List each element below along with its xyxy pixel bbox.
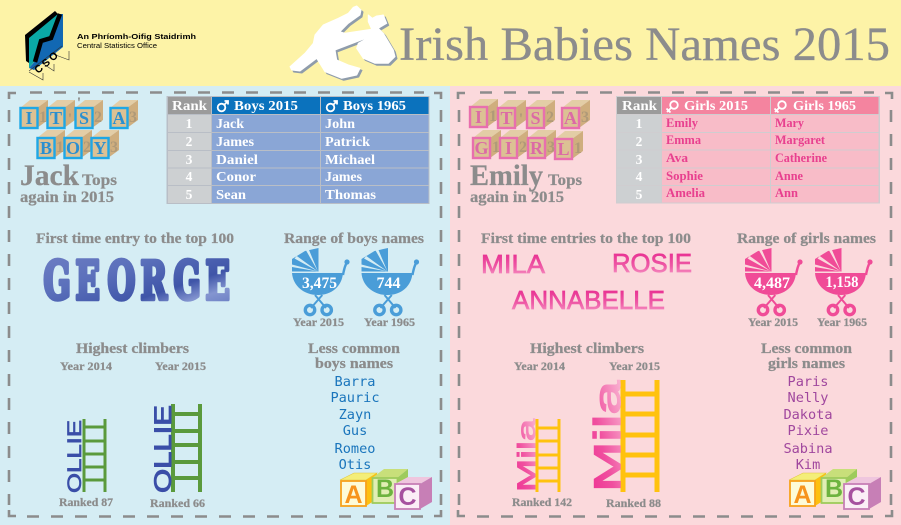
blocks: IT'S A BOY: Y [94,138,106,158]
table: boys names: Conor [216,169,256,184]
icon: ABC blocks girls: A [793,481,812,509]
table: boys names: 5 [186,187,193,202]
name: GEORGE: GEORGE [44,251,230,312]
blocks: IT'S A GIRL: R [530,138,544,158]
blocks: IT'S A BOY: 1 [39,109,47,126]
icon: ABC blocks boys [340,469,432,511]
table: boys names: 2 [186,134,193,149]
heading: Emily tops again in 2015: Tops [548,172,582,189]
blocks: IT'S A BOY: 2 [83,139,91,156]
dashed border: boys [9,92,441,516]
caption: ranks girls: Ranked 142 [512,497,572,509]
table: girls names: Anne [775,169,803,183]
table: boys names: 4 [186,169,193,184]
blocks: IT'S A BOY: S [79,108,89,128]
caption: climber years boys: Year 2014 [60,361,112,373]
table: boys names: James [325,169,362,184]
list: less common girls names: Paris [788,374,828,390]
blocks: IT'S A BOY: 1 [56,139,64,156]
icon: ABC blocks girls: C [847,483,866,511]
icon: pram 1965 girls [815,248,873,315]
blocks: IT'S A GIRL: 1 [574,140,582,157]
caption: pram years boys [293,317,415,329]
list: less common boys names: Barra [335,374,375,390]
logo: Central Statistics Office [25,11,197,80]
blocks: IT'S A GIRL: A [564,108,577,128]
icon: pram 1965 boys [362,248,419,315]
list: less common girls names: Kim [796,457,820,473]
blocks: IT'S A GIRL: S [530,108,541,128]
table: boys names: Jack [216,116,245,131]
table: boys names: James [216,134,254,149]
heading: Jack tops again in 2015: again in 2015 [20,189,114,206]
blocks: IT'S A GIRL [470,99,590,159]
heading: less common girls names [761,341,852,372]
table: girls names: Catherine [775,151,827,165]
icon: ABC blocks boys: C [398,483,417,511]
caption: climber years boys [60,361,206,373]
table: girls names: Emily [666,116,699,130]
icon: pram 2015 girls [745,248,803,315]
caption: ranks girls [512,497,661,510]
logo: Central Statistics Office: An Phríomh-Oifig Staidrimh [77,32,197,41]
heading: highest climbers boys: Highest climbers [76,341,189,357]
table: girls names: Amelia [666,186,706,200]
blocks: IT'S A GIRL: 3 [547,139,555,156]
list: less common girls names: Pixie [788,423,828,439]
table: girls names [616,96,880,204]
caption: pram years girls: Year 1965 [817,317,867,329]
ladder: Mila 2014 [513,419,559,492]
panel: girls background [450,86,901,525]
title: Irish Babies Names 2015 [399,18,890,71]
table: girls names: 3 [636,152,643,167]
list: less common boys names [330,374,380,473]
caption: climber years girls: Year 2014 [514,361,565,373]
caption: pram years girls [748,317,867,329]
blocks: IT'S A GIRL: G [474,138,489,158]
list: less common boys names: Otis [339,457,371,473]
blocks: IT'S A GIRL: 1 [492,139,500,156]
caption: ranks boys: Ranked 87 [59,497,113,509]
blocks: IT'S A BOY: 3 [129,109,137,126]
table: girls names: Girls 2015 [684,98,748,113]
table: boys names: Daniel [216,152,258,167]
ladder: Mila 2015: Mila [587,380,628,492]
table: girls names: Ava [666,151,689,165]
table: boys names: John [325,116,356,131]
names: MILA ROSIE ANNABELLE: MILA [481,249,546,279]
table: boys names: 1 [186,116,193,131]
blocks: IT'S A GIRL: I [475,107,482,127]
heading: less common girls names: girls names [768,356,845,372]
table: girls names: 4 [636,169,643,184]
heading: less common boys names [308,341,400,372]
list: less common boys names: Pauric [330,390,380,406]
icon: stork carrying bundle [290,6,397,80]
heading: Emily tops again in 2015: Emily [470,159,543,192]
ladder: Ollie 2015 [150,404,200,493]
blocks: IT'S A GIRL: 2 [519,139,527,156]
heading: less common boys names: Less common [308,341,400,357]
heading: less common girls names: Less common [761,341,852,357]
icon: ABC blocks boys: A [344,481,363,509]
caption: climber years boys: Year 2015 [155,361,206,373]
table: boys names [166,96,430,204]
caption: climber years girls: Year 2015 [609,361,660,373]
blocks: IT'S A BOY: A [112,108,126,128]
table: boys names: 3 [186,152,193,167]
caption: ranks boys [59,497,205,510]
list: less common girls names: Nelly [788,390,828,406]
list: less common girls names: Dakota [783,407,833,423]
table: girls names: 5 [636,187,643,202]
blocks: IT'S A BOY: ' [77,95,81,112]
blocks: IT'S A GIRL: L [557,139,570,159]
table: girls names: Girls 1965 [793,98,856,113]
icon: pram 2015 boys [292,248,350,315]
table: boys names: Sean [216,187,247,202]
heading: Jack tops again in 2015: Tops [82,172,117,189]
ladder: Mila 2014: Mila [513,419,541,492]
heading: first time entry boys: First time entry to the top 100 [36,231,234,247]
heading: Jack tops again in 2015: Jack [20,159,79,192]
blocks: IT'S A BOY: 2 [94,109,102,126]
names: MILA ROSIE ANNABELLE: ROSIE [612,248,692,278]
caption: ranks boys: Ranked 66 [150,498,205,510]
icon: ABC blocks boys: B [376,475,394,503]
icon: pram 1965 girls: 1,158 [826,274,858,291]
blocks: IT'S A GIRL: T [500,108,513,128]
heading: Jack tops again in 2015 [20,159,117,206]
blocks: IT'S A BOY: 3 [110,139,118,156]
blocks: IT'S A GIRL: 3 [581,109,589,126]
dashed border: girls [458,92,892,516]
table: girls names: Mary [775,116,805,130]
blocks: IT'S A BOY: B [40,138,52,158]
blocks: IT'S A GIRL: 1 [489,108,497,125]
ladder: Mila 2015 [587,380,657,492]
heading: range of girls names: Range of girls names [737,231,876,247]
heading: less common boys names: boys names [315,356,393,372]
heading: Emily tops again in 2015 [470,159,582,206]
icon: ABC blocks girls [789,469,881,511]
list: less common boys names: Romeo [335,441,375,457]
table: girls names: Rank [622,98,658,113]
table: boys names: Boys 1965 [343,98,406,113]
logo: Central Statistics Office: CSO [32,48,62,76]
icon: pram 2015 boys: 3,475 [302,275,337,292]
blocks: IT'S A BOY: O [66,138,80,158]
blocks: IT'S A BOY: ' [68,111,72,128]
blocks: IT'S A BOY: I [25,108,33,128]
table: boys names: Thomas [325,187,376,202]
header band [0,0,901,86]
table: girls names: Emma [666,133,702,147]
table: girls names: 2 [636,134,643,149]
list: less common girls names [783,374,833,473]
blocks: IT'S A GIRL: I [505,138,512,158]
caption: climber years girls [514,361,660,373]
table: boys names: Rank [172,98,208,113]
ladder: Ollie 2014 [65,419,105,493]
caption: ranks girls: Ranked 88 [606,498,661,510]
icon: pram 2015 girls: 4,487 [754,275,790,292]
names: MILA ROSIE ANNABELLE [481,248,692,315]
icon: pram 1965 boys: 744 [376,275,400,292]
table: girls names: Margaret [775,133,826,147]
ladder: Ollie 2014: OLLIE [65,420,86,493]
caption: pram years boys: Year 1965 [364,317,415,329]
table: girls names: 1 [636,116,643,131]
list: less common girls names: Sabina [783,441,833,457]
heading: Emily tops again in 2015: again in 2015 [470,189,564,206]
table: girls names: Ann [775,186,798,200]
ladder: Ollie 2015: OLLIE [150,405,177,493]
blocks: IT'S A GIRL: 2 [546,109,554,126]
names: MILA ROSIE ANNABELLE: ANNABELLE [512,285,665,315]
table: girls names: Sophie [666,169,703,183]
blocks: IT'S A GIRL: ' [519,111,523,128]
blocks: IT'S A BOY: T [50,108,62,128]
table: boys names: Patrick [325,134,371,149]
list: less common boys names: Gus [343,423,367,439]
caption: pram years girls: Year 2015 [748,317,798,329]
heading: first time entries girls: First time entries to the top 100 [481,231,691,247]
heading: highest climbers girls: Highest climbers [530,341,644,357]
heading: range of boys names: Range of boys names [284,231,424,247]
caption: pram years boys: Year 2015 [293,317,344,329]
logo: Central Statistics Office: Central Statistics Office [77,43,157,50]
table: boys names: Michael [325,152,375,167]
icon: ABC blocks girls: B [825,475,843,503]
blocks: IT'S A BOY [20,95,138,158]
panel: boys background [0,86,450,525]
list: less common boys names: Zayn [339,407,371,423]
table: boys names: Boys 2015 [234,98,298,113]
